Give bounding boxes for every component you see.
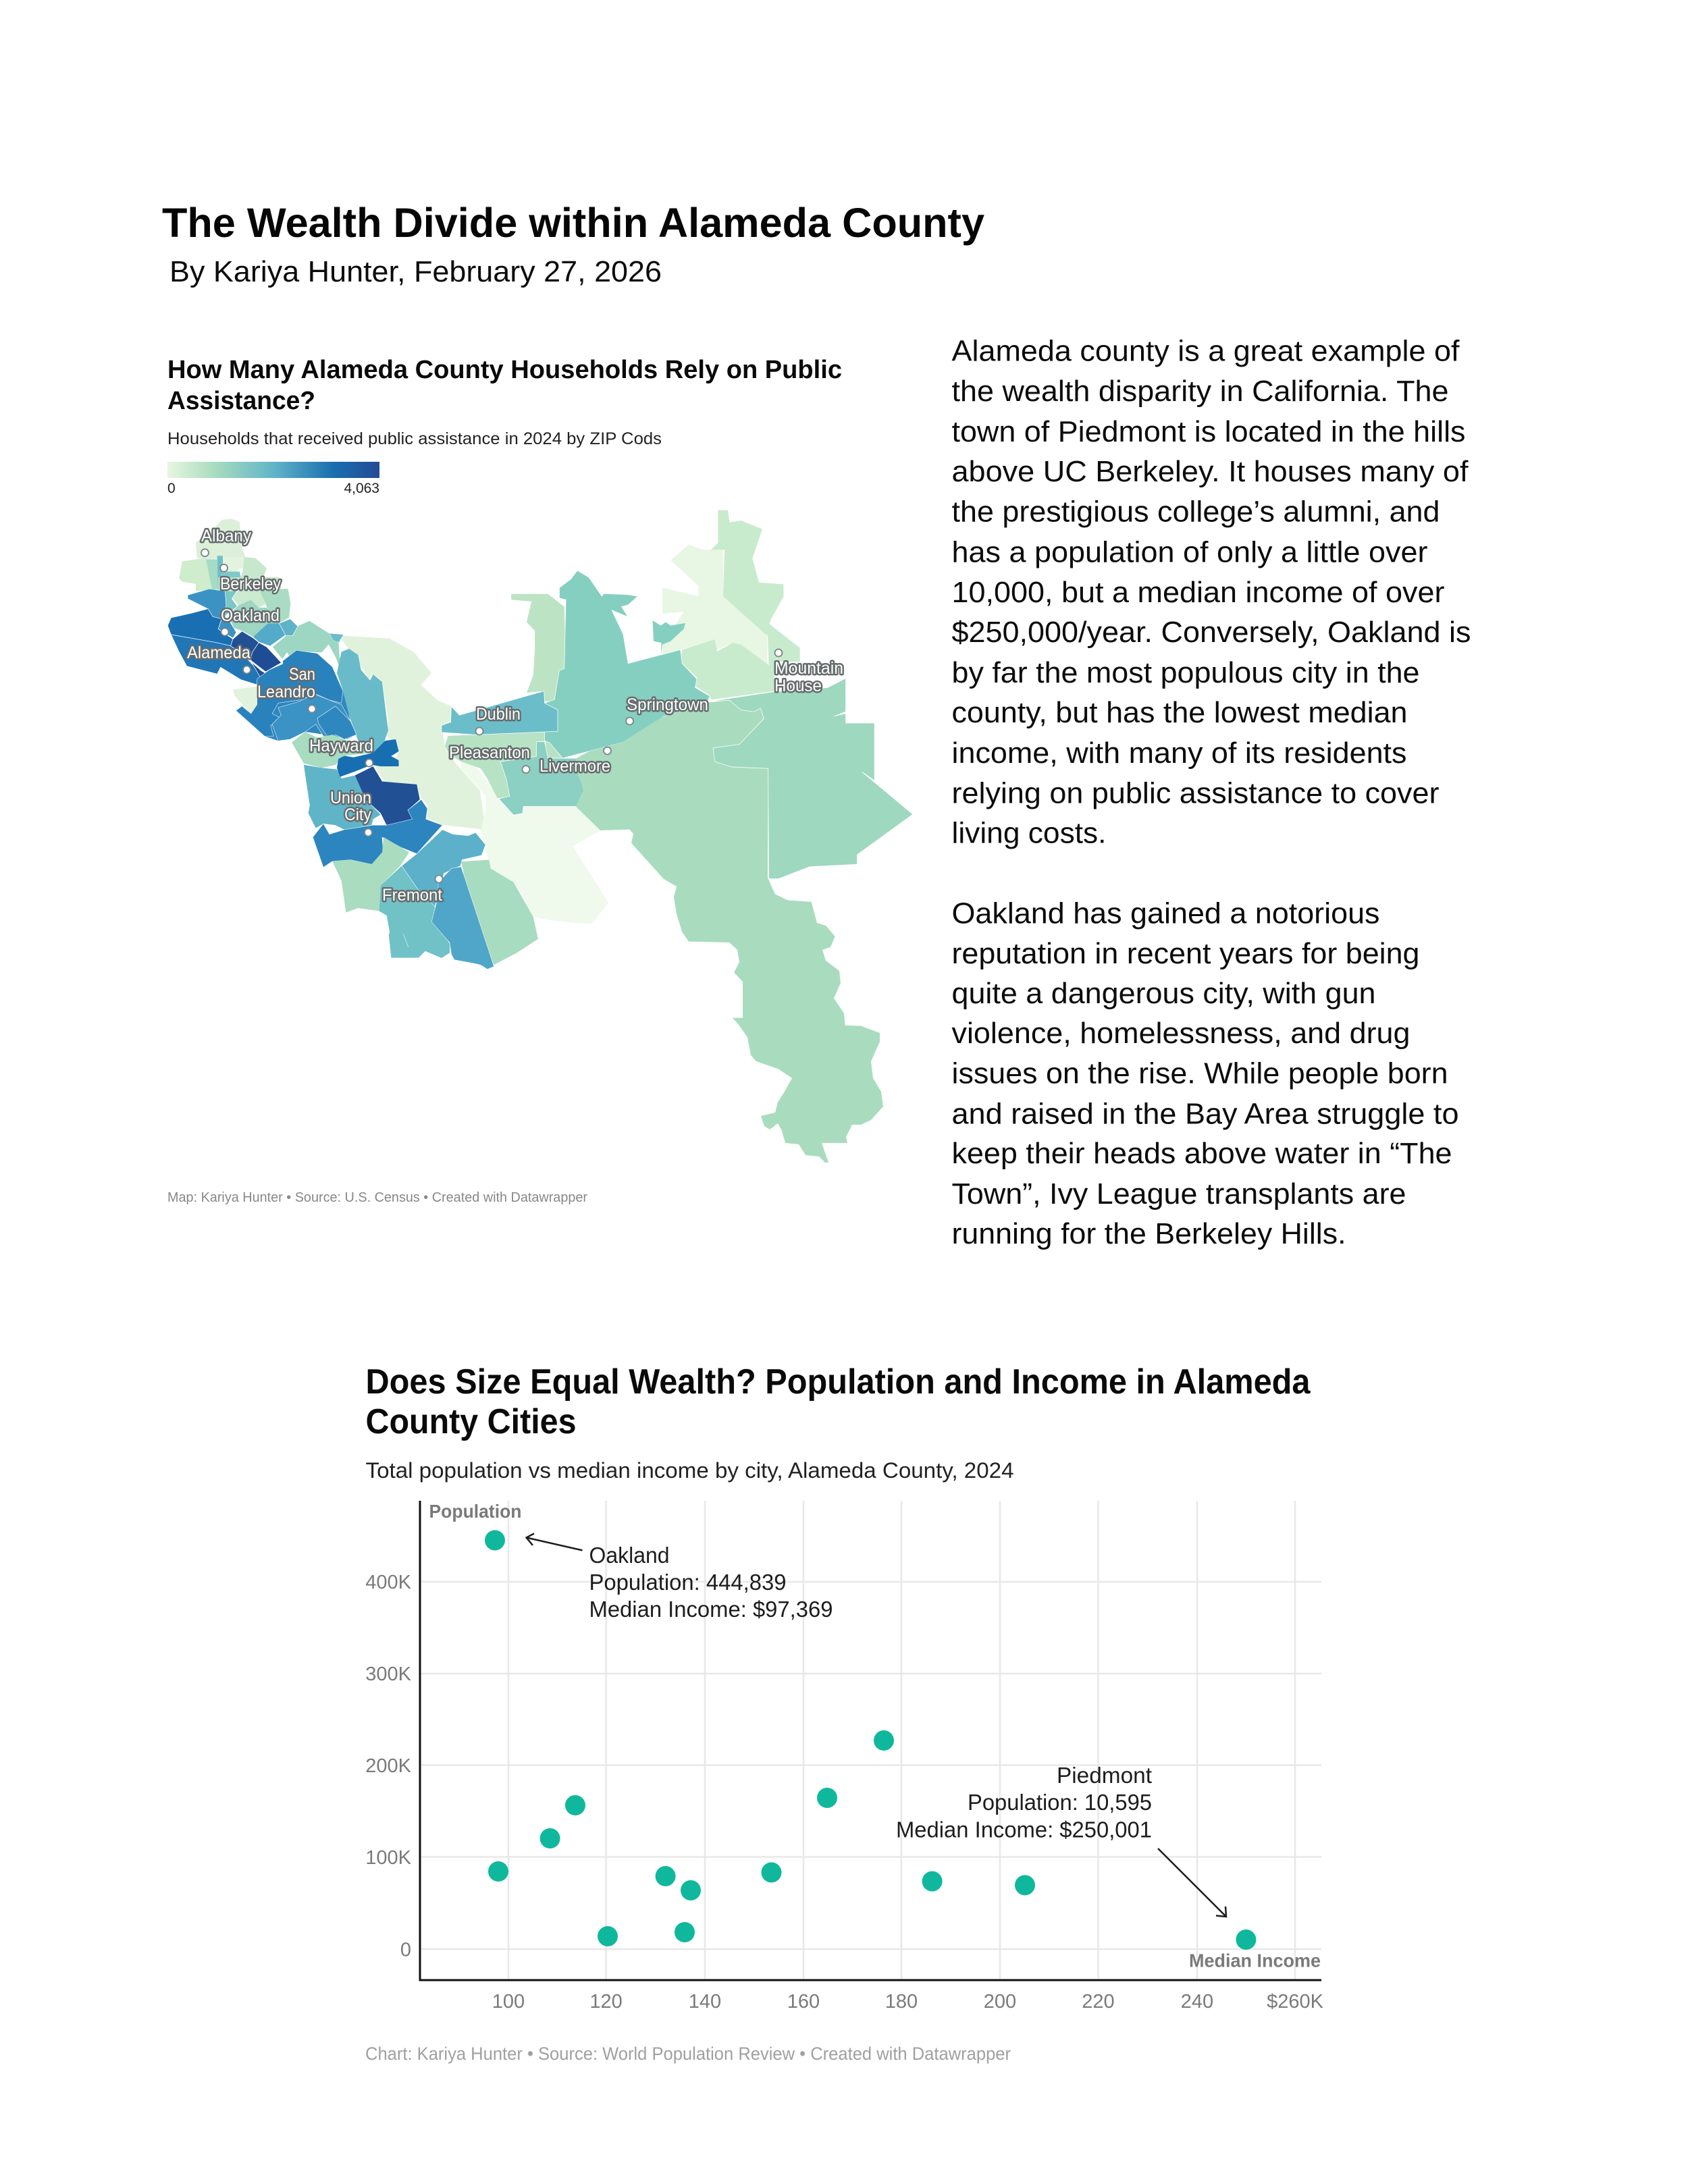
city labels: Union [330, 789, 371, 807]
Piedmont callout: Population: 10,595 [968, 1790, 1152, 1815]
y axis labels: 400K [365, 1572, 412, 1593]
x axis labels: 120 [589, 1991, 623, 2013]
x axis labels: 220 [1082, 1991, 1115, 2013]
body text: first paragraph [952, 335, 1471, 850]
y axis title: Population [429, 1501, 521, 1522]
chart axes [420, 1501, 1321, 1980]
chart subtitle: Total population vs median income by city, Alameda County, 2024 [366, 1458, 1014, 1483]
x axis labels: 180 [885, 1991, 918, 2013]
map heading: Assistance? [167, 387, 315, 415]
x axis labels: 200 [984, 1991, 1016, 2013]
body text: first paragraph: by far the most populous city in the [952, 656, 1419, 689]
city labels: Alameda [187, 643, 250, 662]
data points [485, 1530, 1256, 1950]
body text: first paragraph: $250,000/year. Conversely, Oakland is [952, 616, 1471, 649]
city labels [187, 527, 843, 905]
colour legend: 0 [167, 481, 176, 496]
body text: first paragraph: the prestigious college’s alumni, and [952, 496, 1440, 528]
map heading: How Many Alameda County Households Rely on Public [167, 356, 842, 384]
city labels: San [289, 665, 315, 684]
Berkeley and Oakland ZIP regions [167, 518, 343, 685]
body text: first paragraph: the wealth disparity in California. The [952, 375, 1449, 408]
x axis labels: 100 [492, 1991, 525, 2013]
title: The Wealth Divide within Alameda County [162, 200, 984, 246]
body text: second paragraph: and raised in the Bay Area struggle to [952, 1097, 1458, 1130]
byline: By Kariya Hunter, February 27, 2026 [169, 255, 662, 288]
far-east ZIP region [710, 678, 913, 879]
body text: first paragraph: above UC Berkeley. It houses many of [952, 455, 1469, 488]
x axis labels: 160 [787, 1991, 820, 2013]
body text: first paragraph: has a population of only a little over [952, 536, 1427, 568]
city labels: Livermore [539, 757, 610, 776]
colour legend [167, 462, 379, 496]
chart source note: Chart: Kariya Hunter • Source: World Population Review • Created with Datawrapper [365, 2044, 1011, 2064]
pale central ZIP region [340, 635, 485, 830]
body text: second paragraph: keep their heads above water in “The [952, 1137, 1452, 1170]
body text: first paragraph: living costs. [952, 817, 1106, 850]
x axis labels: 140 [689, 1991, 721, 2013]
city labels: City [344, 805, 371, 824]
y axis labels: 100K [365, 1847, 412, 1869]
city labels: Oakland [221, 606, 280, 625]
x axis labels: 240 [1181, 1991, 1213, 2013]
Piedmont callout [896, 1763, 1152, 1842]
body text: second paragraph: Oakland has gained a notorious [952, 897, 1380, 930]
city labels: House [774, 676, 822, 695]
map heading [167, 356, 842, 415]
scatter chart panel [365, 1362, 1324, 2064]
Oakland callout: Oakland [589, 1543, 670, 1568]
city labels: Berkeley [220, 575, 281, 593]
Oakland callout: Population: 444,839 [589, 1570, 786, 1595]
body text: first paragraph: 10,000, but a median income of over [952, 576, 1445, 609]
x axis labels [492, 1991, 1324, 2013]
body text: second paragraph: running for the Berkeley Hills. [952, 1217, 1346, 1250]
body text: first paragraph: Alameda county is a great example of [952, 335, 1460, 368]
map subtitle: Households that received public assistance in 2024 by ZIP Cods [167, 429, 662, 448]
y axis labels: 0 [400, 1939, 411, 1961]
colour legend: 4,063 [344, 481, 379, 496]
y axis labels: 200K [365, 1755, 412, 1777]
city labels: Leandro [257, 683, 315, 701]
body text: second paragraph: Town”, Ivy League transplants are [952, 1177, 1406, 1210]
body text: second paragraph: violence, homelessness, and drug [952, 1017, 1410, 1050]
eastern county ZIP regions [442, 510, 800, 965]
body text: second paragraph: quite a dangerous city, with gun [952, 977, 1376, 1010]
Piedmont callout: Median Income: $250,001 [896, 1817, 1152, 1842]
body text: first paragraph: income, with many of its residents [952, 737, 1407, 770]
chart heading: Does Size Equal Wealth? Population and Income in Alameda [366, 1362, 1311, 1402]
city location markers [201, 549, 782, 883]
choropleth map [167, 510, 913, 1163]
Oakland callout: Median Income: $97,369 [589, 1597, 833, 1622]
large south-east ZIP region [575, 700, 883, 1163]
body text: second paragraph [952, 897, 1458, 1250]
body text: first paragraph: county, but has the lowest median [952, 696, 1407, 729]
map panel: public assistance by ZIP code [167, 356, 913, 1205]
body text: second paragraph: issues on the rise. While people born [952, 1057, 1448, 1090]
x axis labels: $260K [1267, 1991, 1324, 2013]
map source note: Map: Kariya Hunter • Source: U.S. Census • Created with Datawrapper [167, 1190, 587, 1205]
central and southern bay ZIP regions [233, 649, 494, 969]
city labels: Fremont [382, 886, 442, 905]
city labels: Dublin [476, 705, 521, 724]
city labels: Springtown [627, 695, 708, 714]
y axis labels: 300K [365, 1663, 412, 1685]
Oakland callout [589, 1543, 833, 1622]
city labels: Pleasanton [449, 743, 530, 762]
chart heading [366, 1362, 1311, 1441]
body text: first paragraph: relying on public assistance to cover [952, 777, 1440, 810]
city labels: Mountain [774, 659, 843, 678]
body text: second paragraph: reputation in recent years for being [952, 937, 1419, 970]
Oakland arrow [527, 1534, 582, 1550]
body text: first paragraph: town of Piedmont is located in the hills [952, 415, 1465, 448]
y axis labels [365, 1572, 412, 1961]
city labels: Hayward [309, 737, 373, 755]
Piedmont arrow [1158, 1848, 1226, 1917]
x axis title: Median Income [1189, 1950, 1321, 1971]
chart heading: County Cities [366, 1402, 577, 1441]
Piedmont callout: Piedmont [1057, 1763, 1152, 1788]
city labels: Albany [201, 527, 251, 545]
